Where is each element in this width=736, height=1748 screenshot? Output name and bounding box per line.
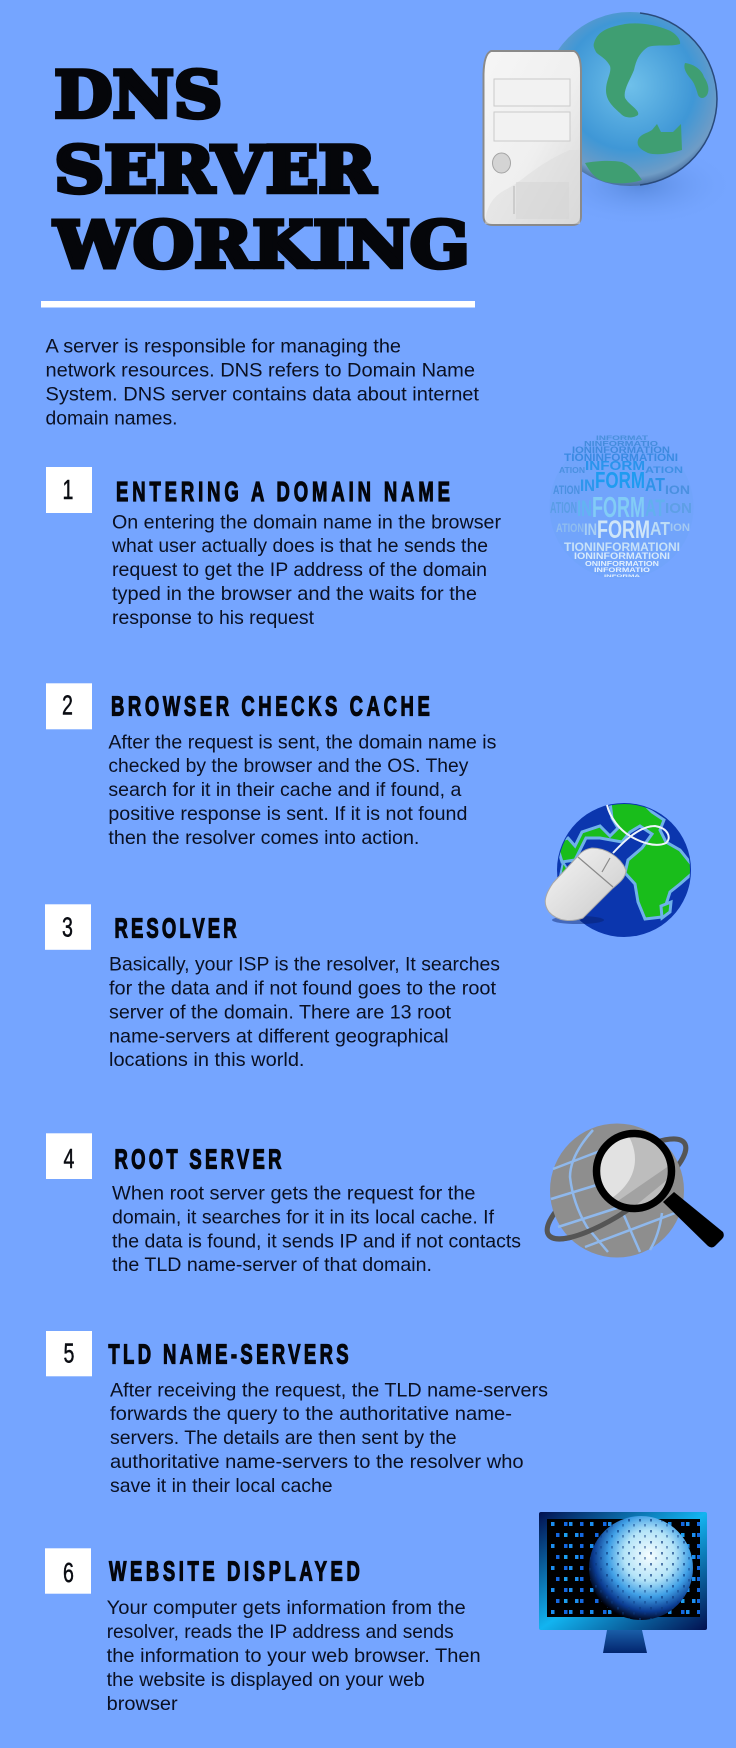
heading 6: WEBSITE DISPLAYED [109,1557,360,1588]
body text 2 [108,731,497,849]
icon: information word globe: INFORMATIO [594,568,650,574]
title: SERVER [54,133,377,208]
panel: step 1 entering a domain name [46,467,502,629]
icon: information word globe: AT [645,475,665,495]
body text 4 [112,1182,521,1276]
intro text: domain names. [46,408,178,430]
number badge 3: 3 [62,912,73,944]
body text 4: domain, it searches for it in its local cache. If [112,1206,495,1228]
icon: information word globe: ATION [553,483,580,497]
number badge 2 [46,683,92,729]
icon: information word globe: FORM [597,516,650,544]
icon: information word globe: ION [665,500,692,517]
number badge 6 [45,1548,91,1594]
body text 5: save it in their local cache [110,1475,333,1497]
body text 3: server of the domain. There are 13 root [109,1001,452,1023]
panel: step 6 website displayed [45,1548,481,1715]
body text 6 [107,1597,481,1715]
panel: step 2 browser checks cache [46,683,497,849]
body text 5: forwards the query to the authoritative name- [110,1403,512,1425]
body text 2: After the request is sent, the domain name is [108,731,497,753]
body text 6: Your computer gets information from the [107,1597,466,1619]
intro text: System. DNS server contains data about internet [46,384,480,406]
icon: information word globe: FORM [592,492,645,524]
number badge 1 [46,467,92,513]
icon: information word globe: NINFORMATIO [584,441,659,448]
body text 4: the data is found, it sends IP and if not contacts [112,1230,521,1252]
icon: information word globe: ONINFORMATION [585,561,659,568]
icon: information word globe: FORM [595,467,645,493]
heading 2: BROWSER CHECKS CACHE [111,692,430,723]
intro text [46,336,480,430]
title [53,58,470,283]
icon: information word globe: ATION [645,465,683,475]
body text 3: locations in this world. [109,1049,304,1071]
intro text: A server is responsible for managing the [46,336,401,358]
number badge 1: 1 [63,475,73,506]
body text 1: request to get the IP address of the domain [112,559,487,581]
body text 3: name-servers at different geographical [109,1025,448,1047]
body text 1: what user actually does is that he sends the [111,535,488,557]
body text 1: On entering the domain name in the browser [112,511,502,533]
body text 1: typed in the browser and the waits for the [112,583,477,605]
icon: information word globe: ION [670,522,690,534]
body text 2: search for it in their cache and if found, a [108,779,462,801]
body text 2: checked by the browser and the OS. They [108,755,469,777]
icon: server with globe [484,12,736,227]
body text 4: When root server gets the request for the [112,1182,476,1204]
number badge 5 [46,1331,92,1376]
number badge 5: 5 [64,1338,74,1369]
icon: information word globe: ION [665,483,690,497]
body text 4: the TLD name-server of that domain. [112,1254,432,1276]
number badge 6: 6 [63,1558,74,1589]
heading 1: ENTERING A DOMAIN NAME [116,477,450,508]
icon: information word globe: ATION [559,466,585,475]
body text 3 [109,953,500,1071]
intro text: network resources. DNS refers to Domain Name [46,360,475,382]
title: DNS [54,58,222,133]
icon: information word globe: TIONINFORMATIONI [564,452,678,464]
body text 5: servers. The details are then sent by the [110,1427,457,1449]
body text 1: response to his request [112,607,315,629]
body text 6: the information to your web browser. Then [107,1645,481,1667]
number badge 2: 2 [62,690,73,721]
body text 2: positive response is sent. If it is not found [108,803,467,825]
body text 3: Basically, your ISP is the resolver, It searches [109,953,500,975]
panel: step 4 root server [46,1133,521,1276]
icon: information word globe: IN [580,476,595,495]
heading 5: TLD NAME-SERVERS [108,1340,349,1370]
heading 3: RESOLVER [114,914,237,944]
icon: information word globe: INFORM [585,458,645,473]
icon: information word globe: INFORMA [604,573,640,578]
icon: information word globe: AT [645,495,665,522]
body text 2: then the resolver comes into action. [108,827,419,849]
icon: information word globe: TIONINFORMATIONI [564,540,680,554]
icon: information word globe [550,435,694,579]
body text 5 [110,1379,548,1497]
body text 6: browser [107,1693,178,1715]
body text 1 [111,511,502,629]
body text 6: the website is displayed on your web [107,1669,425,1691]
panel: step 5 TLD name-servers [46,1331,548,1497]
icon: information word globe: ATION [550,500,577,517]
icon: globe with computer mouse [545,800,696,937]
panel: step 3 resolver [45,904,500,1071]
body text 5: After receiving the request, the TLD name-servers [110,1379,548,1401]
title: WORKING [53,208,470,283]
icon: information word globe: IONINFORMATION [572,445,670,455]
number badge 4 [46,1133,92,1179]
icon: information word globe: ATION [556,521,584,535]
icon: information word globe: INFORMAT [596,436,649,442]
body text 5: authoritative name-servers to the resolver who [110,1451,524,1473]
number badge 4: 4 [64,1144,74,1175]
icon: information word globe: IONINFORMATIONI [574,551,670,561]
icon: information word globe: IN [584,520,597,539]
number badge 3 [45,904,91,950]
icon: information word globe: IN [577,496,592,521]
icon: monitor with data globe [539,1512,707,1653]
body text 6: resolver, reads the IP address and sends [107,1621,454,1643]
heading 4: ROOT SERVER [114,1145,281,1175]
icon: magnifying glass over globe [535,1123,724,1258]
icon: information word globe: AT [650,519,670,539]
body text 3: for the data and if not found goes to the root [109,977,497,999]
